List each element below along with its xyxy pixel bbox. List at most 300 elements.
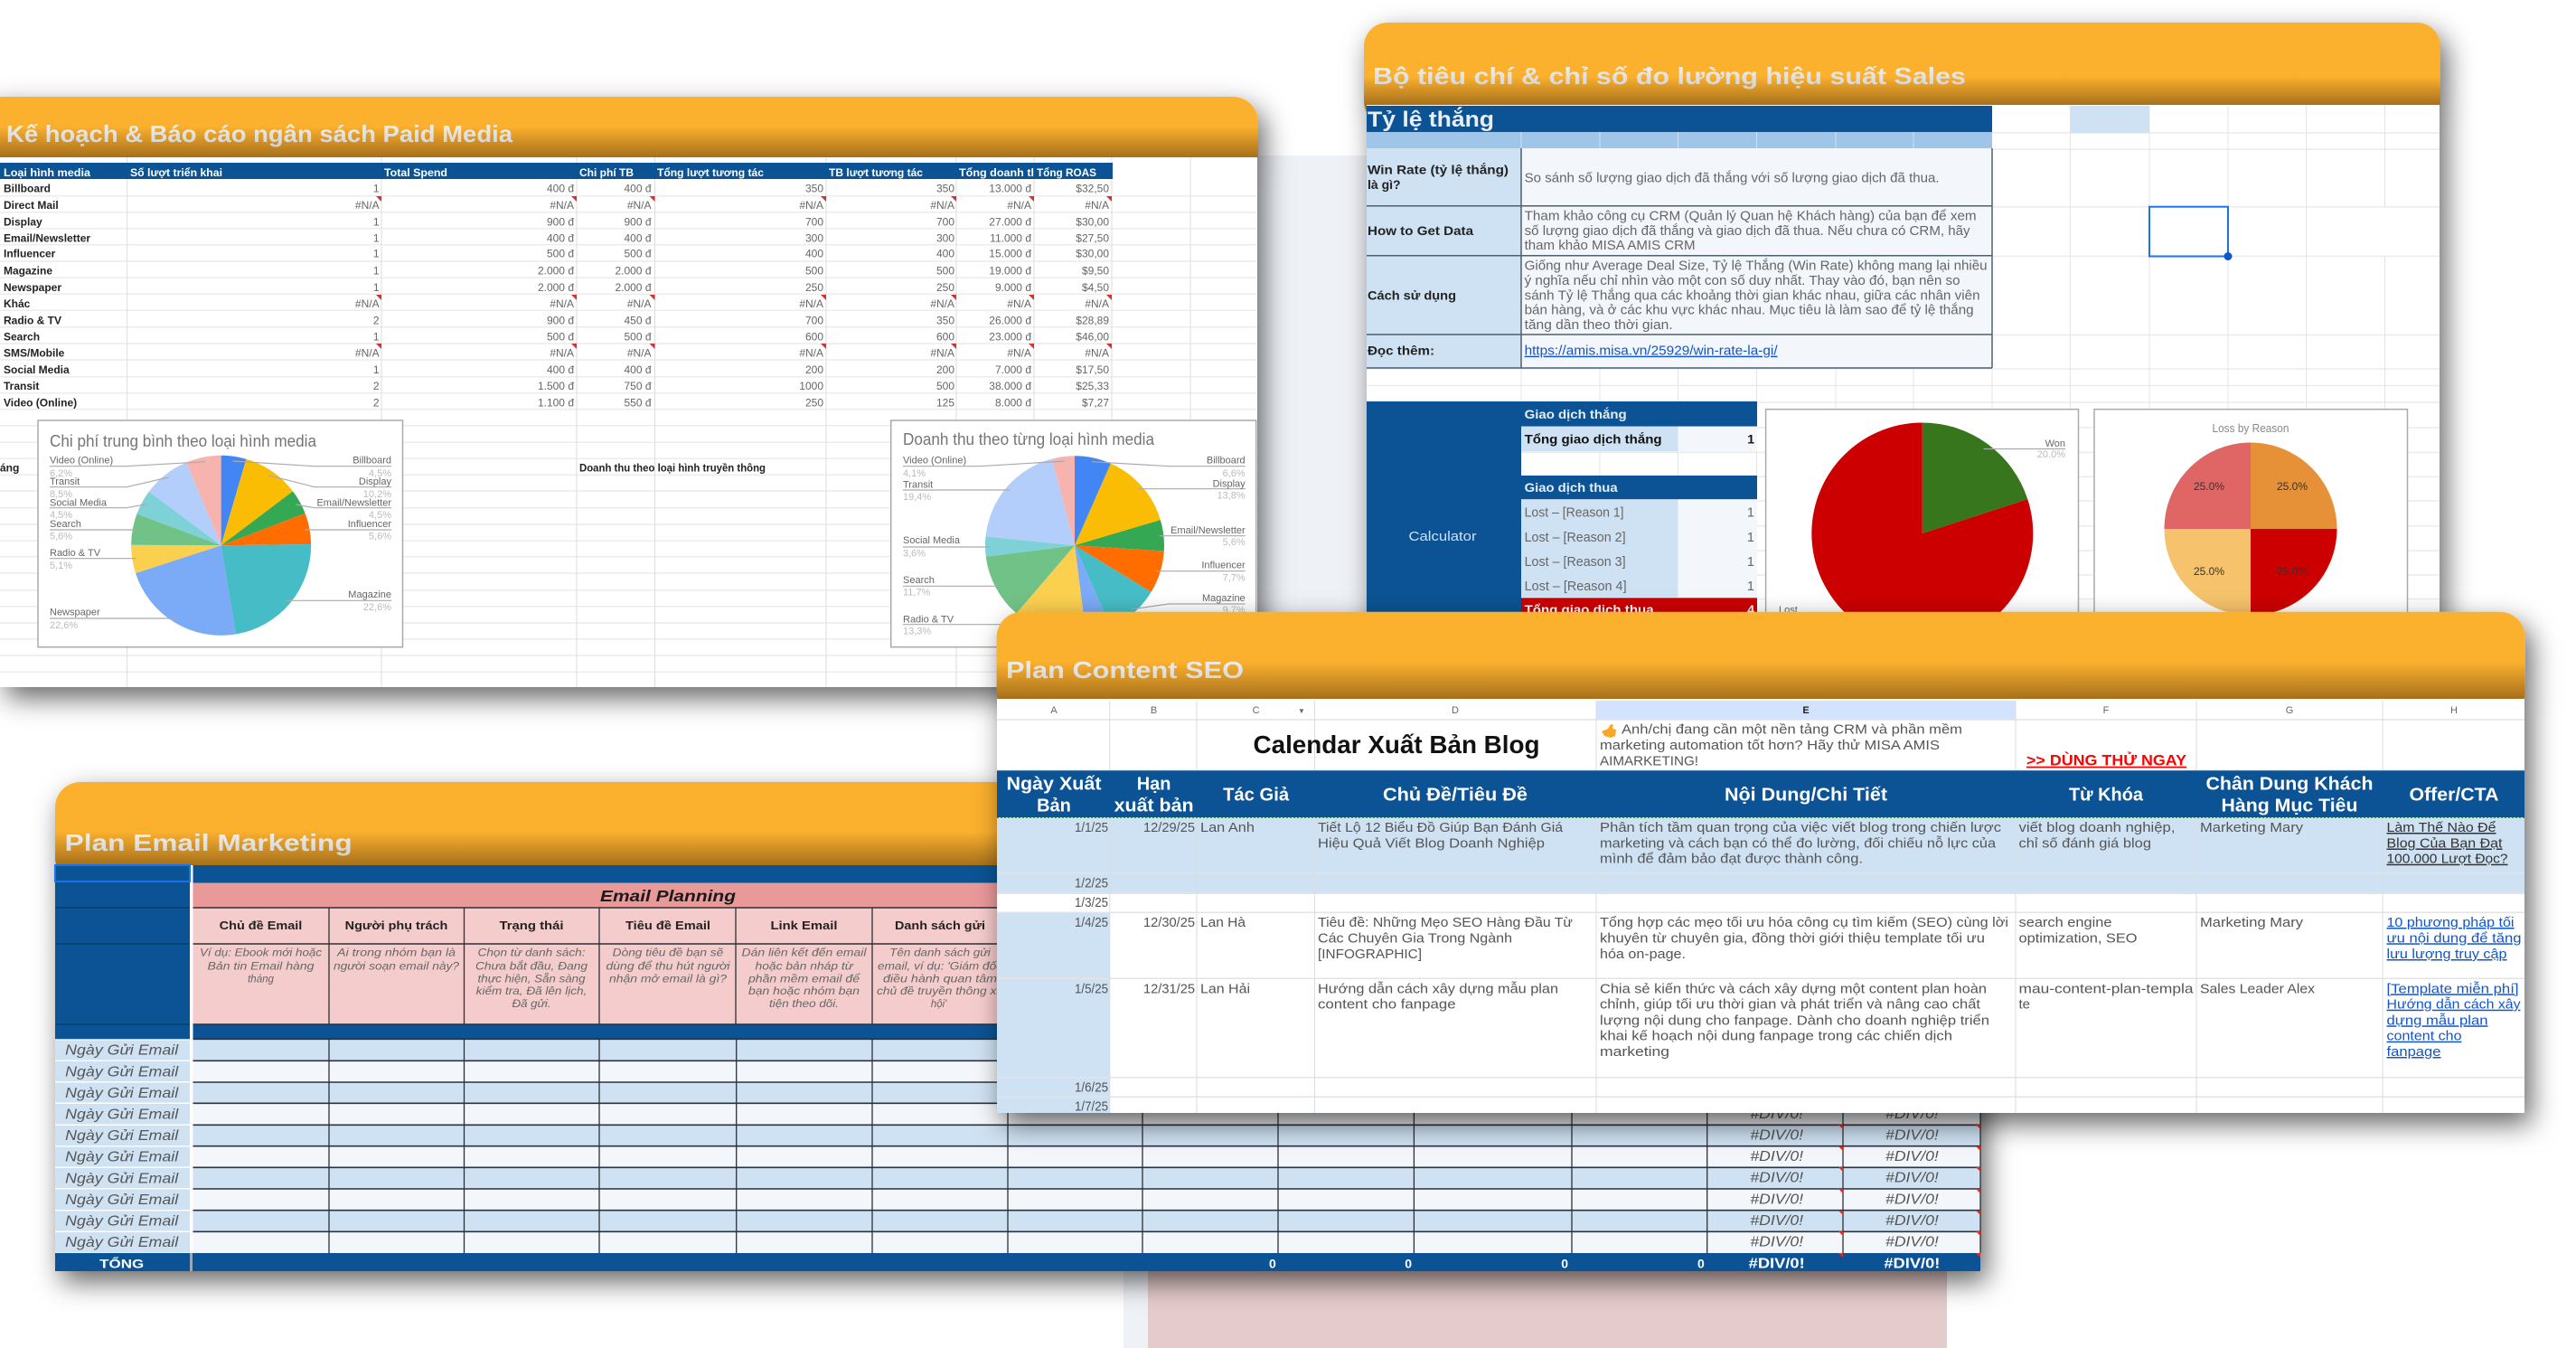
table row: Influencer: Influencer [4,248,56,260]
row: 1/5/25: 12/31/25 [1143,981,1195,996]
chart labels: 19,4% [903,492,931,503]
column headers: Link Email [770,919,837,932]
chart: loss by reason: 25.0% [2194,565,2224,578]
left column: send date labels: Ngày Gửi Email [65,1213,179,1230]
table row: Direct Mail: #N/A [550,199,574,212]
row: 1/4/25 [1075,915,2522,962]
chart labels: Transit [903,479,933,490]
#DIV/0! cells [1750,1107,1939,1249]
leader lines [50,461,391,618]
row: Cách sử dụng: ý nghĩa nếu chỉ nhìn vào một con số duy nhất. Thay vào đó, bạn nên so [1525,274,1960,288]
table row: Direct Mail: #N/A [627,199,651,212]
lost deals block: Lost – [Reason 2] [1525,531,1626,545]
table row: Display: 900 đ [547,215,574,228]
table row: Billboard: 400 đ [624,183,652,195]
table row: Newspaper: 2.000 đ [615,281,652,294]
chart labels: 5,1% [50,561,72,571]
column letters: A [1050,705,1058,716]
row: Cách sử dụng: Giống như Average Deal Size, Tỷ lệ Thắng (Win Rate) không mang lại nhiều [1525,259,1988,274]
table row: Transit: 1000 [799,380,823,392]
pie: won vs lost [1811,423,2033,644]
row: 1/3/25: 1/3/25 [1075,895,1108,910]
chart labels: 4,5% [369,510,391,521]
row: 1/4/25: Marketing Mary [2200,915,2304,930]
row: 1/1/25: Lan Anh [1200,820,1255,835]
table row: Radio & TV [4,314,1109,326]
column descriptions: kiểm tra, Đã lên lịch, [476,986,587,997]
table header: Hạn [1137,774,1170,794]
table: Paid Media header row: TB lượt tương tác [829,166,923,179]
table row: Social Media: 7.000 đ [995,363,1031,376]
chart labels: 10,2% [363,489,391,500]
#DIV/0! cells: #DIV/0! [1885,1213,1939,1229]
column descriptions: hoặc bản nháp từ [756,961,853,972]
won deals block [1521,401,1757,451]
table row: Search: 23.000 đ [989,331,1031,344]
table row: Radio & TV: 350 [936,314,954,326]
table row: Video (Online): 125 [936,396,954,409]
column descriptions: Chọn từ danh sách: [477,948,586,959]
row: 1/4/25: lưu lượng truy cập [2386,947,2507,962]
row: 1/4/25: 1/4/25 [1075,915,1108,930]
chart labels: Video (Online) [903,455,966,466]
lost deals block: Giao dịch thua [1525,480,1618,495]
table row: Video (Online): 550 đ [624,396,652,409]
row: 1/5/25: Hướng dẫn cách xây [2386,997,2521,1013]
table row: Search: 600 [936,331,954,344]
#DIV/0! cells: #DIV/0! [1750,1149,1804,1164]
totals row: 0 [1697,1257,1705,1271]
row: How to Get Data: số lượng giao dịch đã thắng và giao dịch đã thua. Nếu chưa có CRM, hãy [1525,223,1970,239]
chart labels [903,455,1246,636]
table row: SMS/Mobile: SMS/Mobile [4,347,65,360]
table row: Transit: 750 đ [624,380,652,392]
table row: Video (Online): $7,27 [1082,396,1109,409]
table row: Search: 500 đ [624,331,652,344]
table row: Video (Online): 2 [373,396,380,409]
table: calculator: Calculator [1408,529,1477,544]
table row: Khác: #N/A [355,297,380,310]
table row: Radio & TV: Radio & TV [4,314,61,326]
chart labels: Social Media [50,497,108,508]
table header: Chủ Đề/Tiêu Đề [1383,786,1528,806]
table row: Billboard: 400 đ [547,183,574,195]
chart labels: Radio & TV [903,614,954,625]
#DIV/0! cells: #DIV/0! [1750,1128,1804,1144]
lost deals block: Lost – [Reason 1] [1525,506,1624,521]
table row: Transit: $25,33 [1076,380,1109,392]
table row: Display [4,215,1109,228]
chart labels: Display [359,476,391,487]
table row: Video (Online) [4,396,1109,409]
highlighted empty cell [2070,106,2149,133]
chart: loss by reason [2094,410,2408,681]
left column: send date labels: Ngày Gửi Email [65,1192,179,1208]
left column: send date labels: Ngày Gửi Email [65,1150,179,1165]
table row: Magazine: 2.000 đ [615,265,652,278]
table row: Search: Search [4,331,40,344]
chart: won vs lost: 20.0% [2037,449,2065,460]
chart labels [50,456,391,631]
table row: Display: 700 [805,215,823,228]
table row: Radio & TV: 900 đ [547,314,574,326]
table row: Transit: 500 [936,380,954,392]
column descriptions: phần mềm email để [747,975,860,985]
column descriptions: người soạn email này? [334,961,460,972]
table row: Social Media: 200 [936,363,954,376]
sidebar: dark blue header column [55,865,190,1039]
table row: Khác: #N/A [799,297,823,310]
totals row: 0 [1269,1257,1276,1271]
row: Win Rate [1368,162,1940,192]
row: 1/1/25: Tiết Lộ 12 Biểu Đồ Giúp Bạn Đánh Giá [1318,820,1564,835]
table row: Newspaper: $4,50 [1082,281,1109,294]
row: 1/5/25: [Template miễn phí] [2386,981,2518,996]
table row: Search: 1 [373,331,380,344]
chart labels: 4,5% [50,510,72,521]
row: 1/5/25: Sales Leader Alex [2200,981,2316,996]
row: 1/5/25: chỉnh, giúp tối ưu thời gian và phát triển và nâng cao chất [1600,997,1981,1013]
table row: Billboard: 13.000 đ [989,183,1031,195]
chart labels: Email/Newsletter [1170,525,1246,536]
column letters [1050,705,2458,716]
left column: send date labels: Ngày Gửi Email [65,1064,179,1079]
chart labels: Radio & TV [50,548,101,559]
table row: SMS/Mobile: #N/A [1007,347,1031,360]
left column: send date labels: Ngày Gửi Email [65,1128,179,1144]
chart: average cost by media type [38,420,403,647]
table row: Email/Newsletter: 300 [805,231,823,244]
chart labels: 22,6% [50,620,78,631]
column descriptions: Dòng tiêu đề bạn sẽ [613,948,723,959]
column descriptions: bạn hoặc nhóm bạn [748,986,860,997]
chart labels: 5,6% [50,532,72,542]
column descriptions: Đã gửi. [512,999,551,1010]
table header: Ngày Xuất [1007,774,1102,794]
table row: Influencer [4,248,1109,260]
table row: Transit: 38.000 đ [989,380,1031,392]
table row: Social Media: Social Media [4,363,70,376]
row: 1/4/25: optimization, SEO [2019,930,2137,946]
row fills [997,701,2524,1113]
table: Paid Media header row [0,163,1113,179]
table row: Khác: #N/A [627,297,651,310]
table header: Tác Giả [1223,786,1290,806]
chart labels: Search [50,519,81,530]
chart labels: Social Media [903,535,961,546]
row: How to Get Data: Tham khảo công cụ CRM (Quản lý Quan hệ Khách hàng) của bạn để xem [1525,209,1977,223]
table row: Display: 1 [373,215,380,228]
row: Cách sử dụng: bán hàng, và ở các khu vực khác nhau. Mục tiêu là làm sao để tỷ lệ thắng [1525,303,1974,318]
column letters: G [2286,705,2293,716]
promo text: AIMARKETING! [1600,754,1698,769]
promo text: Anh/chị đang cần một nền tảng CRM và phần mềm [1622,722,1962,738]
chart: loss by reason: 25.0% [2277,565,2308,578]
row: 1/4/25: khuyên từ chuyên gia, đồng thời giới thiệu template tối ưu [1600,930,1985,946]
#DIV/0! cells: #DIV/0! [1885,1107,1939,1122]
column descriptions: Dán liên kết đến email [741,948,867,959]
table row: Email/Newsletter: 1 [373,231,380,244]
won deals block: Tổng giao dịch thắng [1525,431,1662,447]
column letters: C [1253,705,1260,716]
#DIV/0! cells: #DIV/0! [1750,1213,1804,1229]
chart labels: Magazine [348,589,391,600]
chart labels: Email/Newsletter [316,497,391,508]
table row: Transit: Transit [4,380,39,392]
table row: Video (Online): 250 [805,396,823,409]
left column: send date labels: Ngày Gửi Email [65,1171,179,1186]
lost deals block: Lost – [Reason 3] [1525,555,1626,570]
row: 1/4/25: ưu nội dung để tăng [2386,930,2522,946]
error markers on #N/A cells [376,196,1112,349]
table row: Influencer: 15.000 đ [989,248,1031,260]
row: Win Rate: Win Rate (tỷ lệ thắng) [1368,162,1509,177]
column descriptions: Ví dụ: Ebook mới hoặc [200,948,322,959]
table row: Influencer: 500 đ [547,248,574,260]
row: 1/1/25: mình để đảm bảo đạt được thành công. [1600,852,1863,867]
icon: pointing hand [1602,724,1616,738]
column letters: B [1151,705,1157,716]
table row: SMS/Mobile [4,347,1109,360]
call to action link: >> DÙNG THỬ NGAY [2026,752,2187,769]
table row: Khác: Khác [4,297,31,310]
chart labels: Influencer [348,519,391,530]
table row: Search [4,331,1109,344]
row: 1/4/25: Tiêu đề: Những Mẹo SEO Hàng Đầu Từ [1318,915,1573,930]
table row: Influencer: 400 [936,248,954,260]
row: 1/4/25: [INFOGRAPHIC] [1318,947,1422,962]
table row: Display: 700 [936,215,954,228]
chart: average cost by media type: Chi phí trung bình theo loại hình media [50,432,317,450]
table row: SMS/Mobile: #N/A [627,347,651,360]
banner: Tỷ lệ thắng [1367,106,1992,132]
column letters: D [1452,705,1459,716]
totals row: #DIV/0! [1884,1257,1940,1272]
background sheet behind the panels [1123,156,1947,1348]
row: Cách sử dụng: sánh Tỷ lệ Thắng qua các khoảng thời gian khác nhau, giữa các nhân viên [1525,288,1980,303]
chart labels: Newspaper [50,608,100,618]
row: 1/1/25: marketing và cách bạn có thể đo lường, đối chiếu nỗ lực của [1600,835,1997,852]
row: 1/5/25: Hướng dẫn cách xây dựng mẫu plan [1318,981,1558,996]
table row: Search: 500 đ [547,331,574,344]
#DIV/0! cells: #DIV/0! [1885,1192,1939,1208]
table row: Magazine: 1 [373,265,380,278]
table row: Radio & TV: 2 [373,314,380,326]
chart labels: Transit [50,476,80,487]
chart labels: 22,6% [363,602,391,613]
row: Đọc thêm: https://amis.misa.vn/25929/win-rate-la-gi/ [1525,344,1779,359]
chart labels: 11,7% [903,588,931,599]
totals row [55,1253,1980,1272]
table row: Newspaper: 250 [805,281,823,294]
#DIV/0! cells: #DIV/0! [1750,1107,1804,1122]
table header: Offer/CTA [2410,786,2498,806]
totals row: #DIV/0! [1749,1257,1805,1272]
data rows background [193,1040,1980,1253]
label: revenue by traditional media: Doanh thu theo loại hình truyền thông [579,462,766,475]
row: 1/5/25: fanpage [2386,1044,2440,1060]
table header: Hàng Mục Tiêu [2222,797,2357,816]
heading: Email Marketing: Plan Email Marketing [65,829,353,856]
row: 1/5/25: marketing [1600,1044,1669,1060]
row: 1/5/25: Lan Hải [1200,981,1250,996]
row: 1/4/25: 10 phương pháp tối [2386,915,2515,930]
row: Cách sử dụng: tăng dần theo thời gian. [1525,318,1673,333]
table row: Direct Mail [4,199,1109,212]
won deals block: Giao dịch thắng [1525,406,1627,421]
clipped label: áng [0,462,19,475]
table row: Influencer: 1 [373,248,380,260]
table row: Transit: 1.500 đ [538,380,574,392]
column headers: Trạng thái [499,919,564,932]
row: Cách sử dụng: Cách sử dụng [1368,288,1456,303]
table row: Newspaper: 9.000 đ [995,281,1031,294]
chart: won vs lost: Won [2045,438,2065,449]
table header: Từ Khóa [2069,786,2144,806]
column headers: Danh sách gửi [895,919,985,932]
lost deals block: 1 [1747,555,1754,570]
table header [997,770,2524,817]
row: 1/4/25: Các Chuyên Gia Trong Ngành [1318,930,1512,946]
row: Win Rate: So sánh số lượng giao dịch đã thắng với số lượng giao dịch đã thua. [1525,171,1940,186]
pie: loss by reason [2164,443,2337,615]
row: 1/5/25: mau-content-plan-templa [2019,981,2194,996]
row: 1/5/25: te [2019,997,2030,1013]
column descriptions: Tên danh sách gửi [889,948,991,959]
table row: Video (Online): 8.000 đ [995,396,1031,409]
chart: loss by reason: Loss by Reason [2213,422,2289,435]
table row: SMS/Mobile: #N/A [930,347,954,360]
table row: Direct Mail: #N/A [930,199,954,212]
chart labels: Video (Online) [50,456,113,467]
table row: Influencer: $30,00 [1076,248,1109,260]
table row: SMS/Mobile: #N/A [1085,347,1109,360]
row: 1/1/25: Phân tích tầm quan trọng của việc viết blog trong chiến lược [1600,820,2002,835]
table row: SMS/Mobile: #N/A [799,347,823,360]
selected cell with fill handle [2149,207,2233,260]
#DIV/0! cells: #DIV/0! [1750,1192,1804,1208]
table row: Email/Newsletter: $27,50 [1076,231,1109,244]
row: 1/1/25: 12/29/25 [1143,820,1195,835]
table row: Direct Mail: Direct Mail [4,199,59,212]
column descriptions: Ai trong nhóm bạn là [336,948,456,959]
lost deals block: Lost – [Reason 4] [1525,580,1627,594]
table row: Transit: 2 [373,380,380,392]
row: How to Get Data: tham khảo MISA AMIS CRM [1525,239,1696,253]
heading: Sales: Bộ tiêu chí & chỉ số đo lường hiệu suất Sales [1373,62,1966,90]
chart labels: 4,5% [369,468,391,479]
table row: Newspaper: 250 [936,281,954,294]
column descriptions: email, ví dụ: 'Giám đốc [878,961,1002,972]
lost deals block: 1 [1747,506,1754,521]
#DIV/0! cells: #DIV/0! [1750,1234,1804,1249]
row: 1/5/25: khai kế hoạch nội dung fanpage trong các chiến dịch [1600,1029,1952,1044]
chart labels: 13,8% [1217,490,1246,501]
table row: Display: $30,00 [1076,215,1109,228]
band: Email Planning [193,883,1980,908]
table row: Newspaper: 1 [373,281,380,294]
lost deals block: 4 [1747,602,1754,617]
#DIV/0! cells: #DIV/0! [1885,1234,1939,1249]
chart labels: 3,6% [903,548,926,559]
row: How to Get Data: How to Get Data [1368,223,1473,238]
chart labels: 5,6% [369,532,391,542]
promo text: marketing automation tốt hơn? Hãy thử MISA AMIS [1600,738,1940,753]
chart: won vs lost: Lost [1779,605,1798,616]
table row: Newspaper: Newspaper [4,281,61,294]
chart labels: 5,6% [1223,537,1246,548]
row: Đọc thêm: Đọc thêm: [1368,344,1434,358]
pie: average cost [131,456,311,636]
table: Paid Media header row: Loại hình media [4,166,90,179]
table row: Magazine [4,265,1109,278]
table row: Billboard: 350 [805,183,823,195]
sheet title: Calendar Xuất Bản Blog [1253,731,1540,759]
table row: Direct Mail: #N/A [799,199,823,212]
totals row: TỔNG [99,1256,144,1271]
chart labels: 9,7% [1223,605,1246,616]
chart: loss by reason: 25.0% [2277,480,2308,493]
column descriptions: tiện theo dõi. [769,999,839,1010]
table: Paid Media header row: Tổng lượt tương tác [657,166,764,179]
table row: Social Media: 1 [373,363,380,376]
row: 1/1/25: 1/1/25 [1075,820,1108,835]
column descriptions: điều hành quan tâm [883,975,998,985]
table row: Billboard [4,183,1109,195]
row: 1/1/25: Blog Của Bạn Đạt [2386,835,2503,852]
table row: Magazine: 19.000 đ [989,265,1031,278]
chart labels: 13,3% [903,626,931,636]
lost deals block: 1 [1747,580,1754,594]
row: 1/5/25: Chia sẻ kiến thức và cách xây dựng một content plan hoàn [1600,981,1987,996]
heading: Content SEO: Plan Content SEO [1006,656,1244,683]
band: lower blue row [193,1024,1980,1039]
table row: Khác: #N/A [1085,297,1109,310]
table row: Influencer: 400 [805,248,823,260]
panel: Paid Media budget plan [0,97,1258,687]
table row: Search: 600 [805,331,823,344]
lost deals block: Tổng giao dịch thua [1525,602,1654,617]
table row: Email/Newsletter: 11.000 đ [990,231,1031,244]
column descriptions: Bản tin Email hàng [208,961,315,972]
table: Paid Media header row: Tổng ROAS [1037,166,1096,179]
table row: Transit [4,380,1109,392]
table: Paid Media header row: Total Spend [384,166,447,179]
row: 1/5/25: content cho fanpage [1318,997,1456,1013]
table row: Display: Display [4,215,42,228]
column letters: ▼ [1298,707,1305,715]
table header: xuất bản [1114,797,1194,816]
row: 1/1/25: viết blog doanh nghiệp, [2019,820,2175,835]
table row: Social Media: $17,50 [1076,363,1109,376]
column descriptions: nhận mở email là gì? [609,975,728,985]
table: Paid Media header row: Chi phí TB [579,166,634,179]
chart: loss by reason: 25.0% [2194,480,2224,493]
table row: Magazine: 500 [936,265,954,278]
row: 1/1/25 [1075,820,2507,867]
column letters: E [1802,705,1810,716]
chart labels: Billboard [353,456,391,467]
table row: Magazine: Magazine [4,265,52,278]
column descriptions: tháng [248,975,274,985]
table row: Social Media: 400 đ [547,363,574,376]
table: win rate definition [1367,106,1992,368]
table row: Radio & TV: 700 [805,314,823,326]
row: How to Get Data [1368,209,1977,253]
row: 1/5/25 [1075,981,2521,1060]
table row: Direct Mail: #N/A [355,199,380,212]
row: 1/1/25: Làm Thế Nào Để [2386,820,2496,835]
